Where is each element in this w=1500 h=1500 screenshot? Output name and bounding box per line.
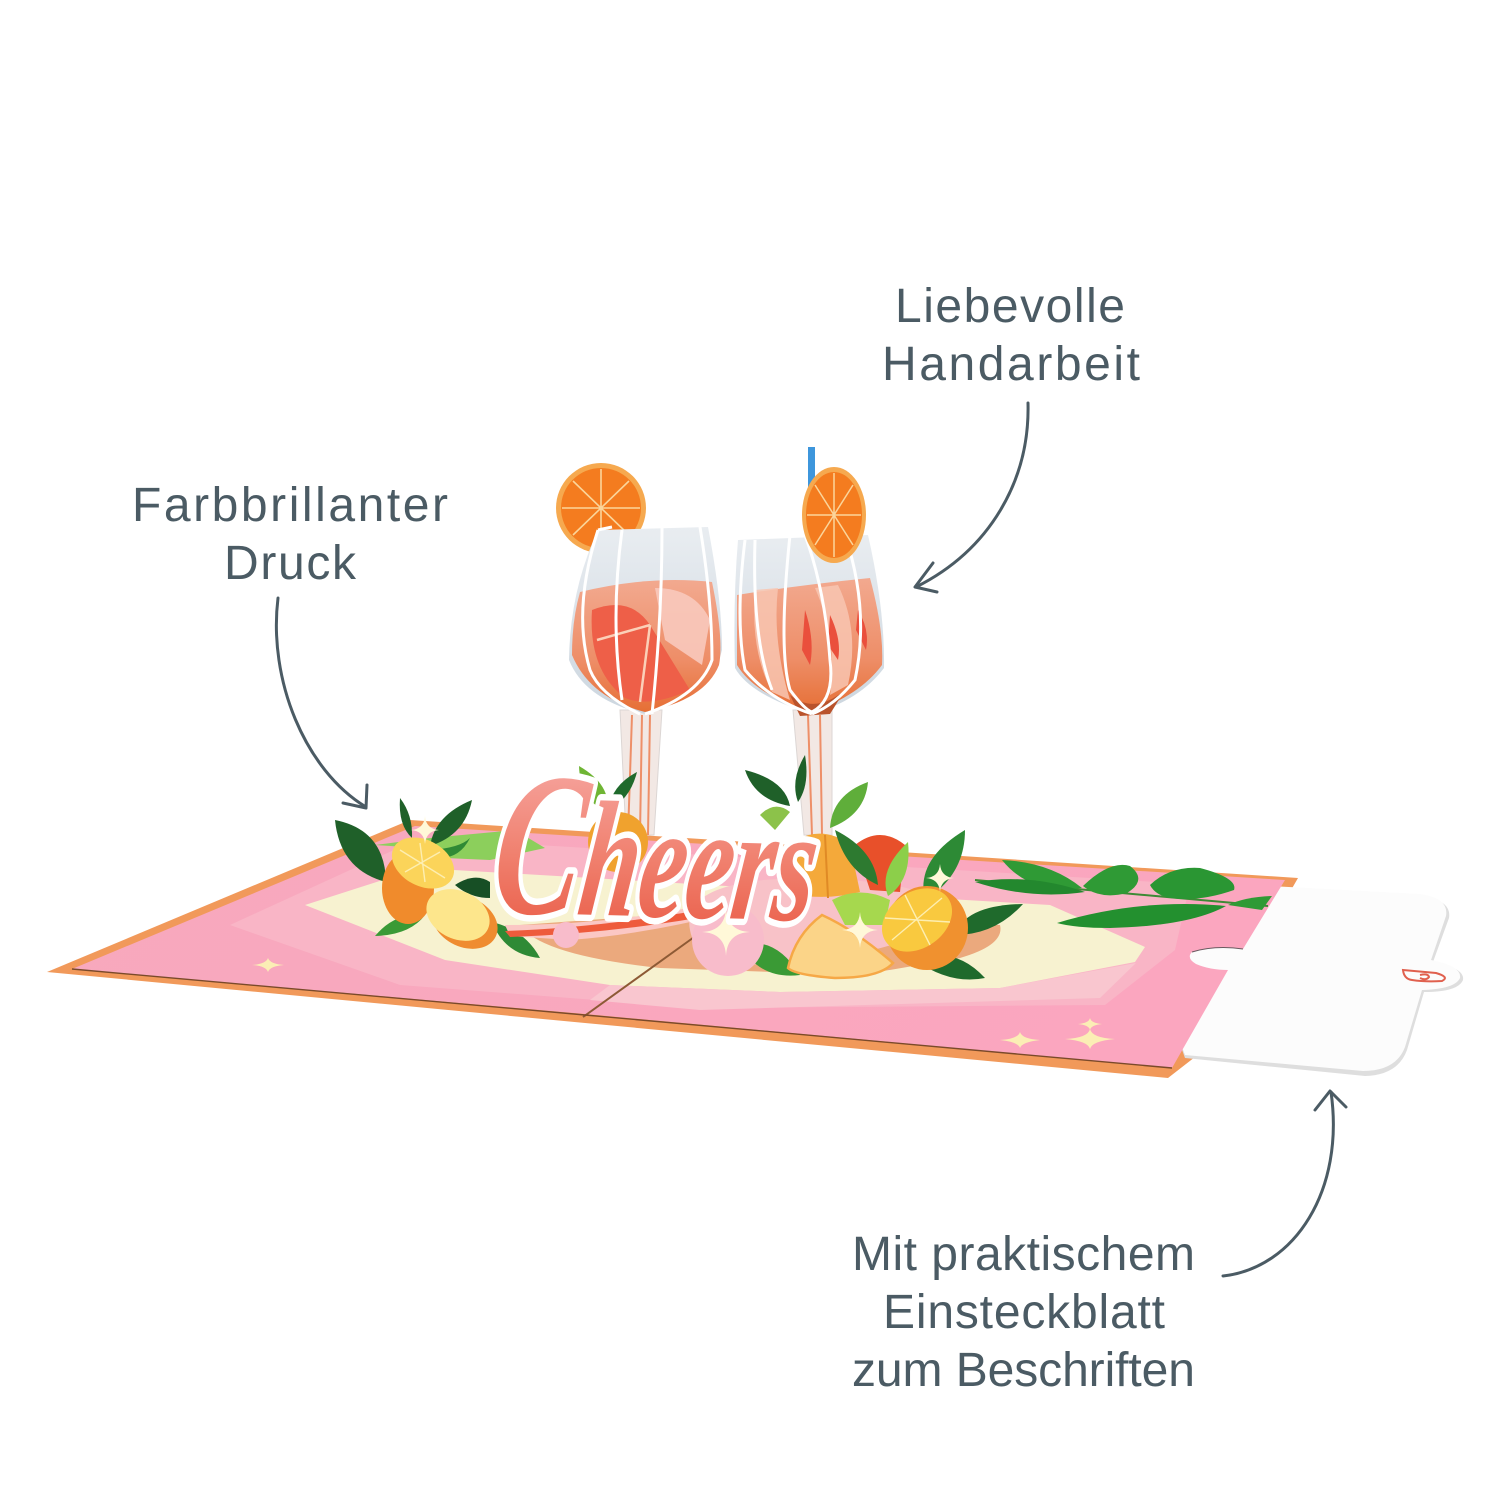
fruit behind lettering	[579, 766, 648, 872]
orange box fruit	[795, 834, 860, 897]
orange table circle	[520, 912, 1000, 975]
orange slice	[802, 467, 866, 563]
red fruit	[855, 835, 905, 892]
grapefruit bits	[802, 610, 867, 665]
glass panel edges	[740, 535, 861, 714]
label: Farbbrillanter Druck: Druck	[224, 537, 357, 590]
lettering: Cheers: Cheers	[482, 731, 834, 965]
drink	[737, 578, 882, 712]
drink stripes	[754, 585, 852, 700]
arrow: to glasses	[915, 403, 1028, 592]
pop-up card	[47, 820, 1463, 1078]
lemon half	[424, 885, 506, 959]
orange half	[886, 886, 968, 970]
lighter pink panel	[230, 838, 1190, 1008]
right citrus cluster	[692, 755, 1023, 980]
cream heart shape	[305, 868, 1145, 992]
stem	[620, 710, 662, 835]
label: Farbbrillanter Druck: Farbbrillanter	[132, 479, 448, 532]
label: Liebevolle Handarbeit: Handarbeit	[882, 338, 1140, 391]
pink disc behind fruit	[689, 878, 950, 965]
bowl	[569, 527, 722, 714]
swoosh under lettering	[505, 900, 725, 948]
label: Farbbrillanter Druck	[132, 479, 448, 590]
notch hairline	[1192, 948, 1243, 952]
leaf	[608, 772, 637, 810]
orange slice	[556, 463, 646, 553]
label: Mit praktischem Einsteckblatt zum Beschriften: Einsteckblatt	[883, 1286, 1165, 1339]
bowl	[734, 535, 884, 714]
left citrus cluster	[335, 798, 540, 959]
left glass with orange slice	[556, 463, 722, 835]
arrow: to card print	[276, 598, 367, 808]
label: Mit praktischem Einsteckblatt zum Beschriften: zum Beschriften	[852, 1344, 1195, 1397]
sparkle stars on card	[252, 958, 1115, 1049]
pink sparkle ball	[692, 904, 764, 976]
label: Liebevolle Handarbeit	[882, 280, 1140, 391]
card back: orange layer	[47, 820, 1298, 1078]
icon: heart logo	[1403, 970, 1445, 981]
right glass with orange slice and straw	[734, 447, 884, 835]
orange half	[382, 852, 434, 924]
stem	[793, 710, 832, 835]
printed leaf branch	[975, 860, 1272, 928]
printed leaves top left	[375, 830, 545, 860]
pink band on cream	[590, 963, 1136, 1010]
leaf	[579, 766, 608, 812]
label: Mit praktischem Einsteckblatt zum Beschriften: Mit praktischem	[852, 1228, 1195, 1281]
lime	[832, 892, 890, 925]
lemon wedge	[788, 915, 893, 978]
leaves	[835, 830, 878, 885]
insert sheet	[1150, 886, 1463, 1076]
straw	[808, 447, 815, 497]
label: Liebevolle Handarbeit: Liebevolle	[895, 280, 1125, 333]
drink	[572, 580, 720, 712]
centre fold	[583, 935, 697, 1017]
arrow: to insert sheet	[1223, 1091, 1346, 1276]
card front: pink artwork	[72, 826, 1285, 1068]
label: Mit praktischem Einsteckblatt zum Beschriften	[852, 1228, 1195, 1397]
grapefruit slice	[592, 605, 690, 702]
glass panel edges	[583, 527, 712, 714]
